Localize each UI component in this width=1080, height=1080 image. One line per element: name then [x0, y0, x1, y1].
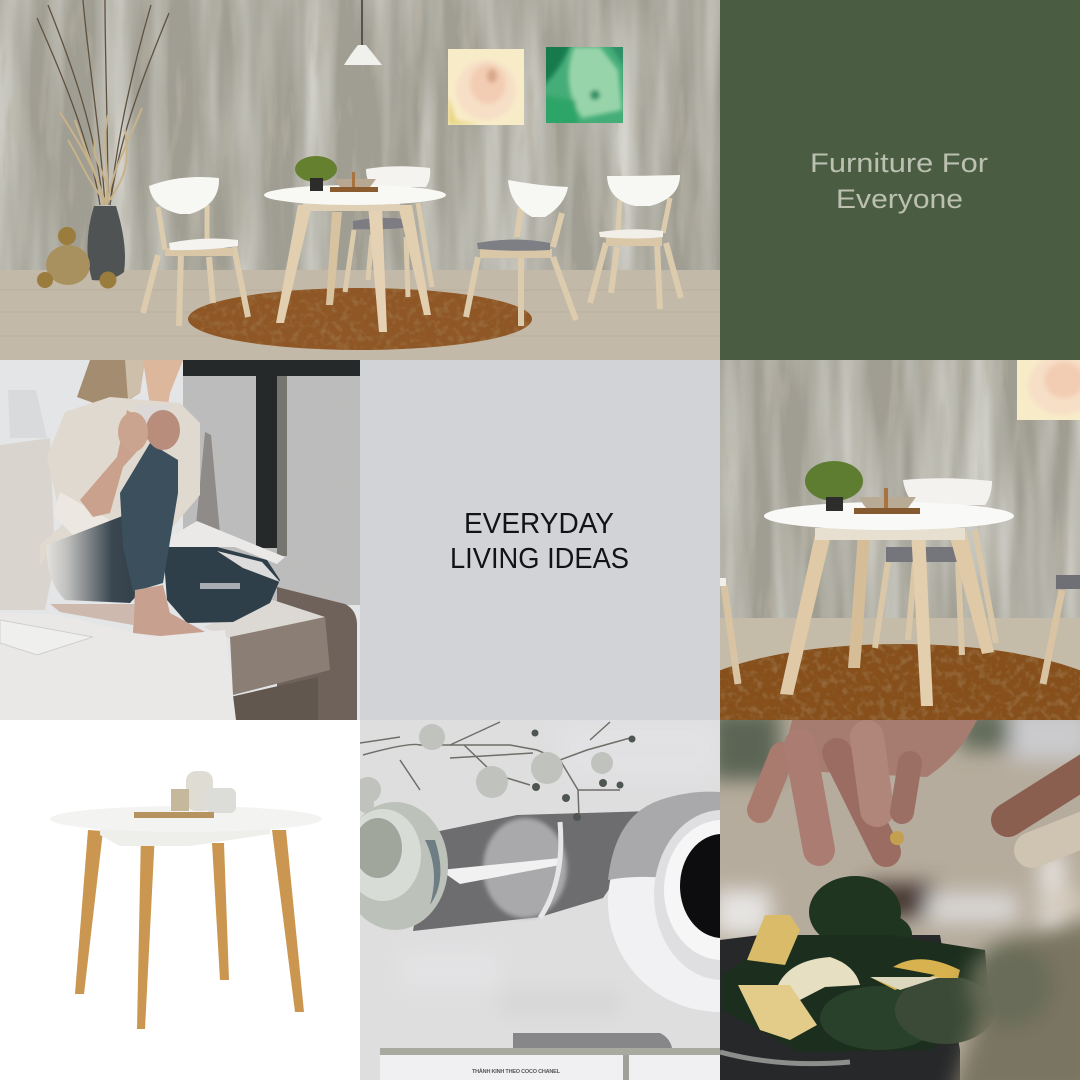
window [183, 360, 360, 605]
vase and balls [37, 206, 125, 288]
blanket back [0, 438, 55, 610]
cloth folds [400, 720, 720, 1015]
panel: woman on sofa photo [0, 360, 360, 720]
chair left [143, 177, 248, 326]
heading: Furniture For Everyone: Everyone [836, 184, 963, 214]
floor [720, 618, 1080, 670]
table apron [100, 826, 270, 846]
dried branches in vase [37, 0, 169, 205]
hip shadow [47, 515, 140, 603]
tray [330, 172, 378, 192]
mug [146, 422, 147, 424]
table shadow [413, 811, 653, 931]
chair front right [466, 180, 576, 326]
side chair legs [720, 575, 1080, 684]
tray [854, 488, 920, 514]
chair behind table [345, 166, 432, 297]
face [143, 360, 183, 405]
magazine: THÀNH KINH THEO COCO CHANEL [472, 1068, 561, 1075]
saucer [608, 792, 832, 1012]
dining table [264, 185, 446, 332]
sofa [196, 432, 357, 720]
table legs [75, 830, 304, 1029]
table top [50, 806, 322, 832]
buds [532, 730, 636, 821]
wall art: rose [448, 49, 524, 125]
heading: Furniture For Everyone: Furniture For [810, 148, 988, 178]
wall texture [0, 0, 720, 272]
woman [40, 360, 280, 639]
heading: Furniture For Everyone [810, 148, 988, 214]
glass vase [342, 802, 448, 930]
panel: food preparation photo [710, 710, 1080, 1080]
far leg [163, 547, 280, 623]
blossoms [355, 724, 613, 813]
plant [805, 461, 863, 511]
chair far right [590, 175, 681, 309]
potted plant [295, 156, 337, 191]
cushions [183, 521, 285, 564]
panel: green title block [720, 0, 1080, 360]
heading: Everyday Living Ideas: EVERYDAY [464, 508, 614, 540]
second hand [1008, 765, 1080, 850]
panel: white table product photo [0, 720, 360, 1080]
book on blanket [0, 620, 93, 655]
magazine [380, 1033, 720, 1080]
floor [0, 270, 720, 360]
blurred background [710, 710, 1080, 940]
tableware [134, 771, 236, 818]
panel: coffee and shadow photo [342, 720, 832, 1080]
coffee cup [664, 820, 780, 960]
wall art: green [546, 47, 623, 123]
round rug [188, 288, 532, 350]
flower sprigs [360, 722, 630, 817]
wall art corner [1017, 355, 1080, 420]
wall box [8, 390, 47, 438]
table [764, 502, 1014, 706]
light through vase [440, 818, 567, 918]
heading: Everyday Living Ideas [450, 508, 629, 575]
pendant lamp [344, 0, 382, 65]
hair [77, 360, 144, 403]
panel: dining room photo [0, 0, 720, 360]
hand [146, 410, 180, 450]
blurred foreground [950, 920, 1080, 1080]
lemon slices [738, 915, 960, 1040]
greens [722, 876, 995, 1052]
rug [720, 644, 1080, 720]
near leg [120, 443, 178, 592]
panel: grey title block [360, 360, 720, 720]
blanket front [133, 630, 236, 720]
chair behind [875, 478, 996, 655]
wall texture [720, 360, 1080, 622]
shirt [50, 397, 200, 542]
panel: table close-up photo [720, 360, 1080, 720]
pointing hand [760, 720, 977, 852]
foot [133, 585, 207, 639]
arm [80, 410, 150, 517]
heading: Everyday Living Ideas: LIVING IDEAS [450, 543, 629, 575]
pan [720, 935, 960, 1080]
